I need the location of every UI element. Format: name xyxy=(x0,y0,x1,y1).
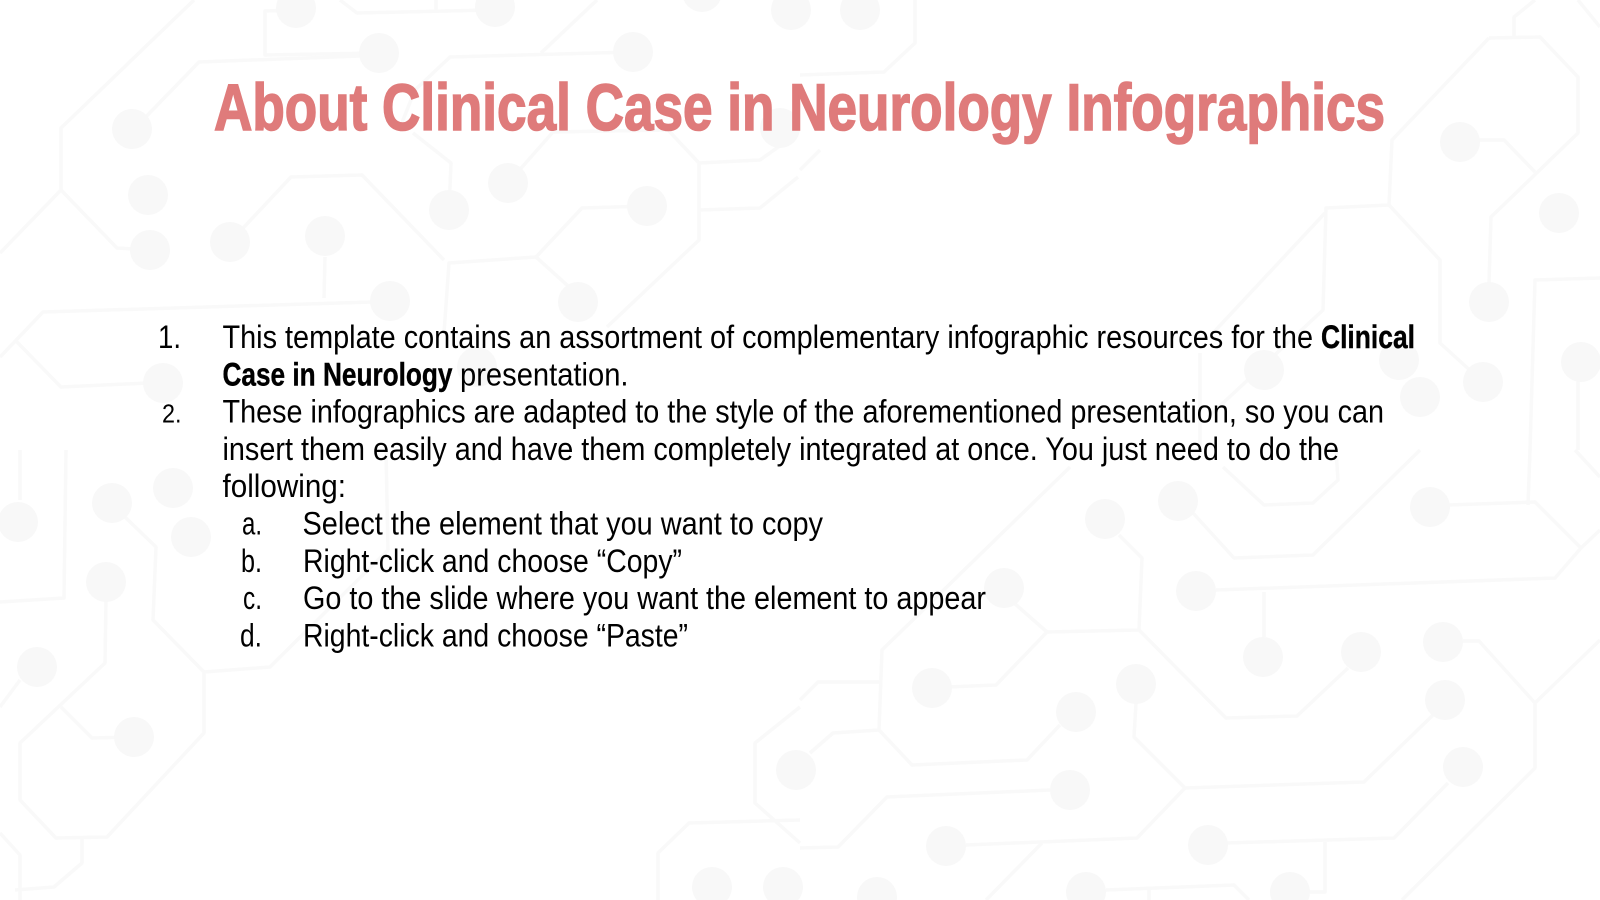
item 2: insert them easily and have them completely integrated at once. You just need to do the xyxy=(222,431,1339,467)
item 1: This template contains an assortment of complementary infographic resources for the xyxy=(222,319,1313,355)
sub-item a: a. xyxy=(242,506,262,542)
numbered instructions list xyxy=(158,319,1415,653)
item 1 xyxy=(158,319,1415,392)
item 1: Case in Neurology xyxy=(222,356,453,392)
sub-item b: Right-click and choose “Copy” xyxy=(303,543,682,579)
item 2: 2. xyxy=(162,399,182,429)
sub-item d: d. xyxy=(240,617,262,653)
sub-item d: Right-click and choose “Paste” xyxy=(303,617,688,653)
item 1: presentation. xyxy=(460,356,628,392)
sub-item c: c. xyxy=(243,580,262,616)
item 1: 1. xyxy=(158,319,181,355)
item 1: Clinical xyxy=(1321,319,1415,355)
sub-item a: Select the element that you want to copy xyxy=(302,506,823,542)
item 2: These infographics are adapted to the style of the aforementioned presentation, so you can xyxy=(222,394,1384,430)
sub-item b: b. xyxy=(241,543,262,579)
item 2 xyxy=(162,394,1384,504)
item 2: following: xyxy=(222,468,346,504)
sub-item c: Go to the slide where you want the element to appear xyxy=(303,580,986,616)
